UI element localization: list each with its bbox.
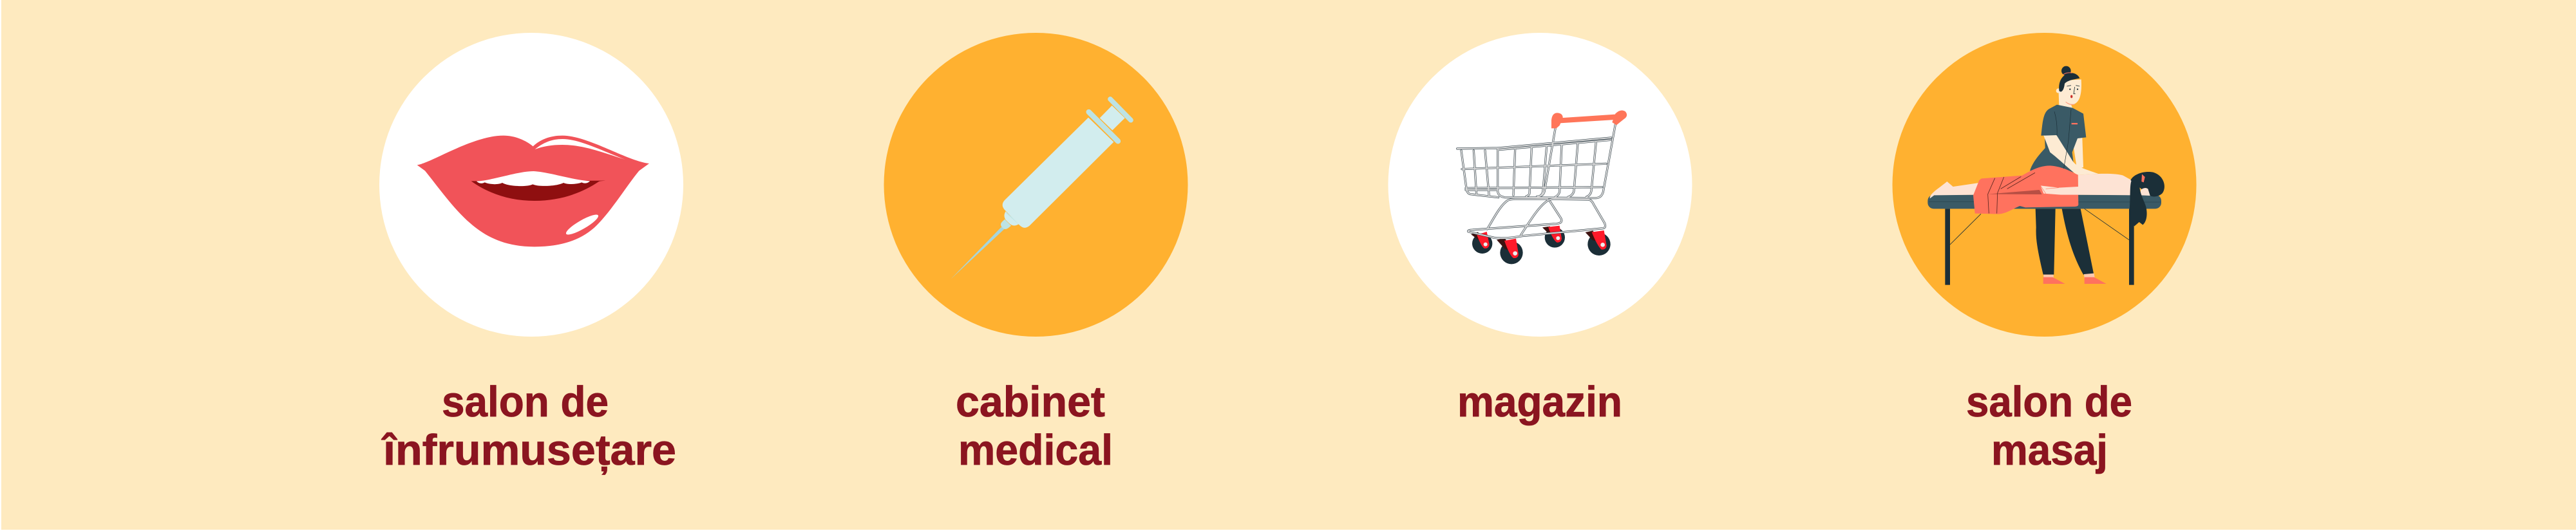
label: salon de înfrumusețare: înfrumusețare (381, 426, 676, 475)
label: salon de masaj: salon de (1966, 378, 2132, 426)
circle: orange background (1892, 33, 2196, 337)
label: salon de masaj: masaj (1991, 426, 2108, 474)
circle: white background (379, 33, 683, 337)
label: salon de masaj (1966, 378, 2132, 474)
label: cabinet medical (956, 378, 1113, 474)
panel: cabinet medical (884, 33, 1188, 474)
label: salon de înfrumusețare: salon de (442, 378, 609, 426)
label: magazin: magazin (1457, 378, 1622, 426)
icon: massage scene (1927, 66, 2164, 285)
icon: syringe (951, 99, 1131, 279)
panel: salon de înfrumusețare (379, 33, 683, 475)
label: salon de înfrumusețare (381, 378, 676, 475)
panel: salon de masaj (1892, 33, 2196, 474)
circle: orange background (884, 33, 1188, 337)
circle: white background (1388, 33, 1692, 337)
icon: shopping cart (1457, 110, 1627, 264)
panel: magazin (1388, 33, 1692, 426)
label: cabinet medical: medical (958, 426, 1113, 474)
icon: lips (417, 136, 649, 247)
label: cabinet medical: cabinet (956, 378, 1105, 426)
